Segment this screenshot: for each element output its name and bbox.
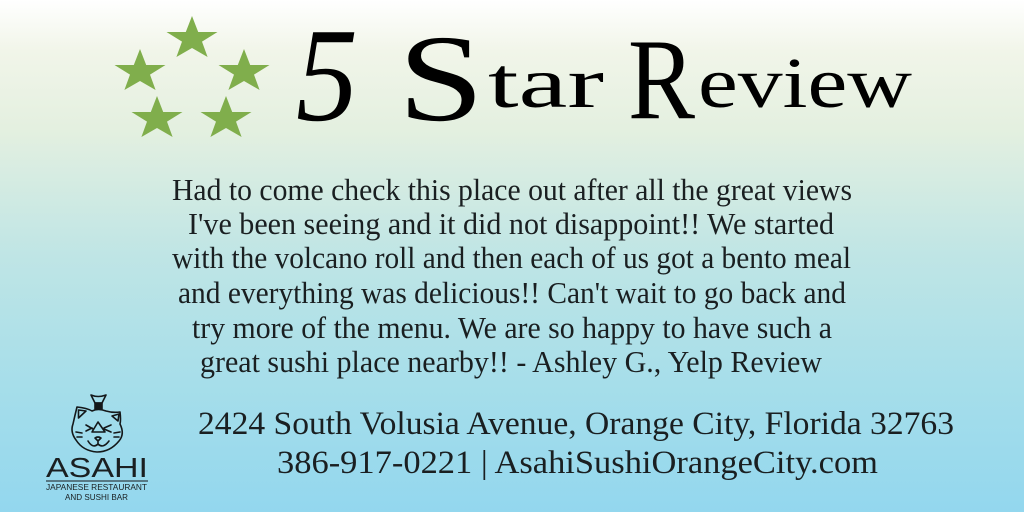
wordmark: ASAHI xyxy=(46,452,148,483)
review text block: with the volcano roll and then each of us got a bento meal xyxy=(172,240,851,275)
address and contact text: 2424 South Volusia Avenue, Orange City, Florida 32763 xyxy=(198,406,954,442)
title: 5 Star Review: S xyxy=(398,10,484,147)
icon: five green stars xyxy=(114,16,270,137)
address and contact text: 386-917-0221 | AsahiSushiOrangeCity.com xyxy=(277,445,878,481)
address and contact text xyxy=(198,406,954,481)
tagline: AND SUSHI BAR xyxy=(65,493,128,502)
review text block xyxy=(172,172,852,379)
title: 5 Star Review: tar xyxy=(488,43,604,123)
icon: cat face xyxy=(72,395,122,452)
review text block: Had to come check this place out after all the great views xyxy=(172,172,852,207)
review text block: and everything was delicious!! Can't wait to go back and xyxy=(178,275,846,310)
title: 5 Star Review: R xyxy=(628,16,696,144)
title: 5 Star Review: 5 xyxy=(296,1,358,149)
title: 5 Star Review: eview xyxy=(698,43,912,123)
review text block: great sushi place nearby!! - Ashley G., Yelp Review xyxy=(200,344,823,379)
logo: Asahi cat and wordmark xyxy=(46,395,148,502)
review text block: try more of the menu. We are so happy to have such a xyxy=(192,310,832,345)
tagline: JAPANESE RESTAURANT xyxy=(46,483,147,492)
tagline xyxy=(46,483,147,502)
title: 5 Star Review xyxy=(296,1,912,149)
review text block: I've been seeing and it did not disappoint!! We started xyxy=(188,206,834,241)
